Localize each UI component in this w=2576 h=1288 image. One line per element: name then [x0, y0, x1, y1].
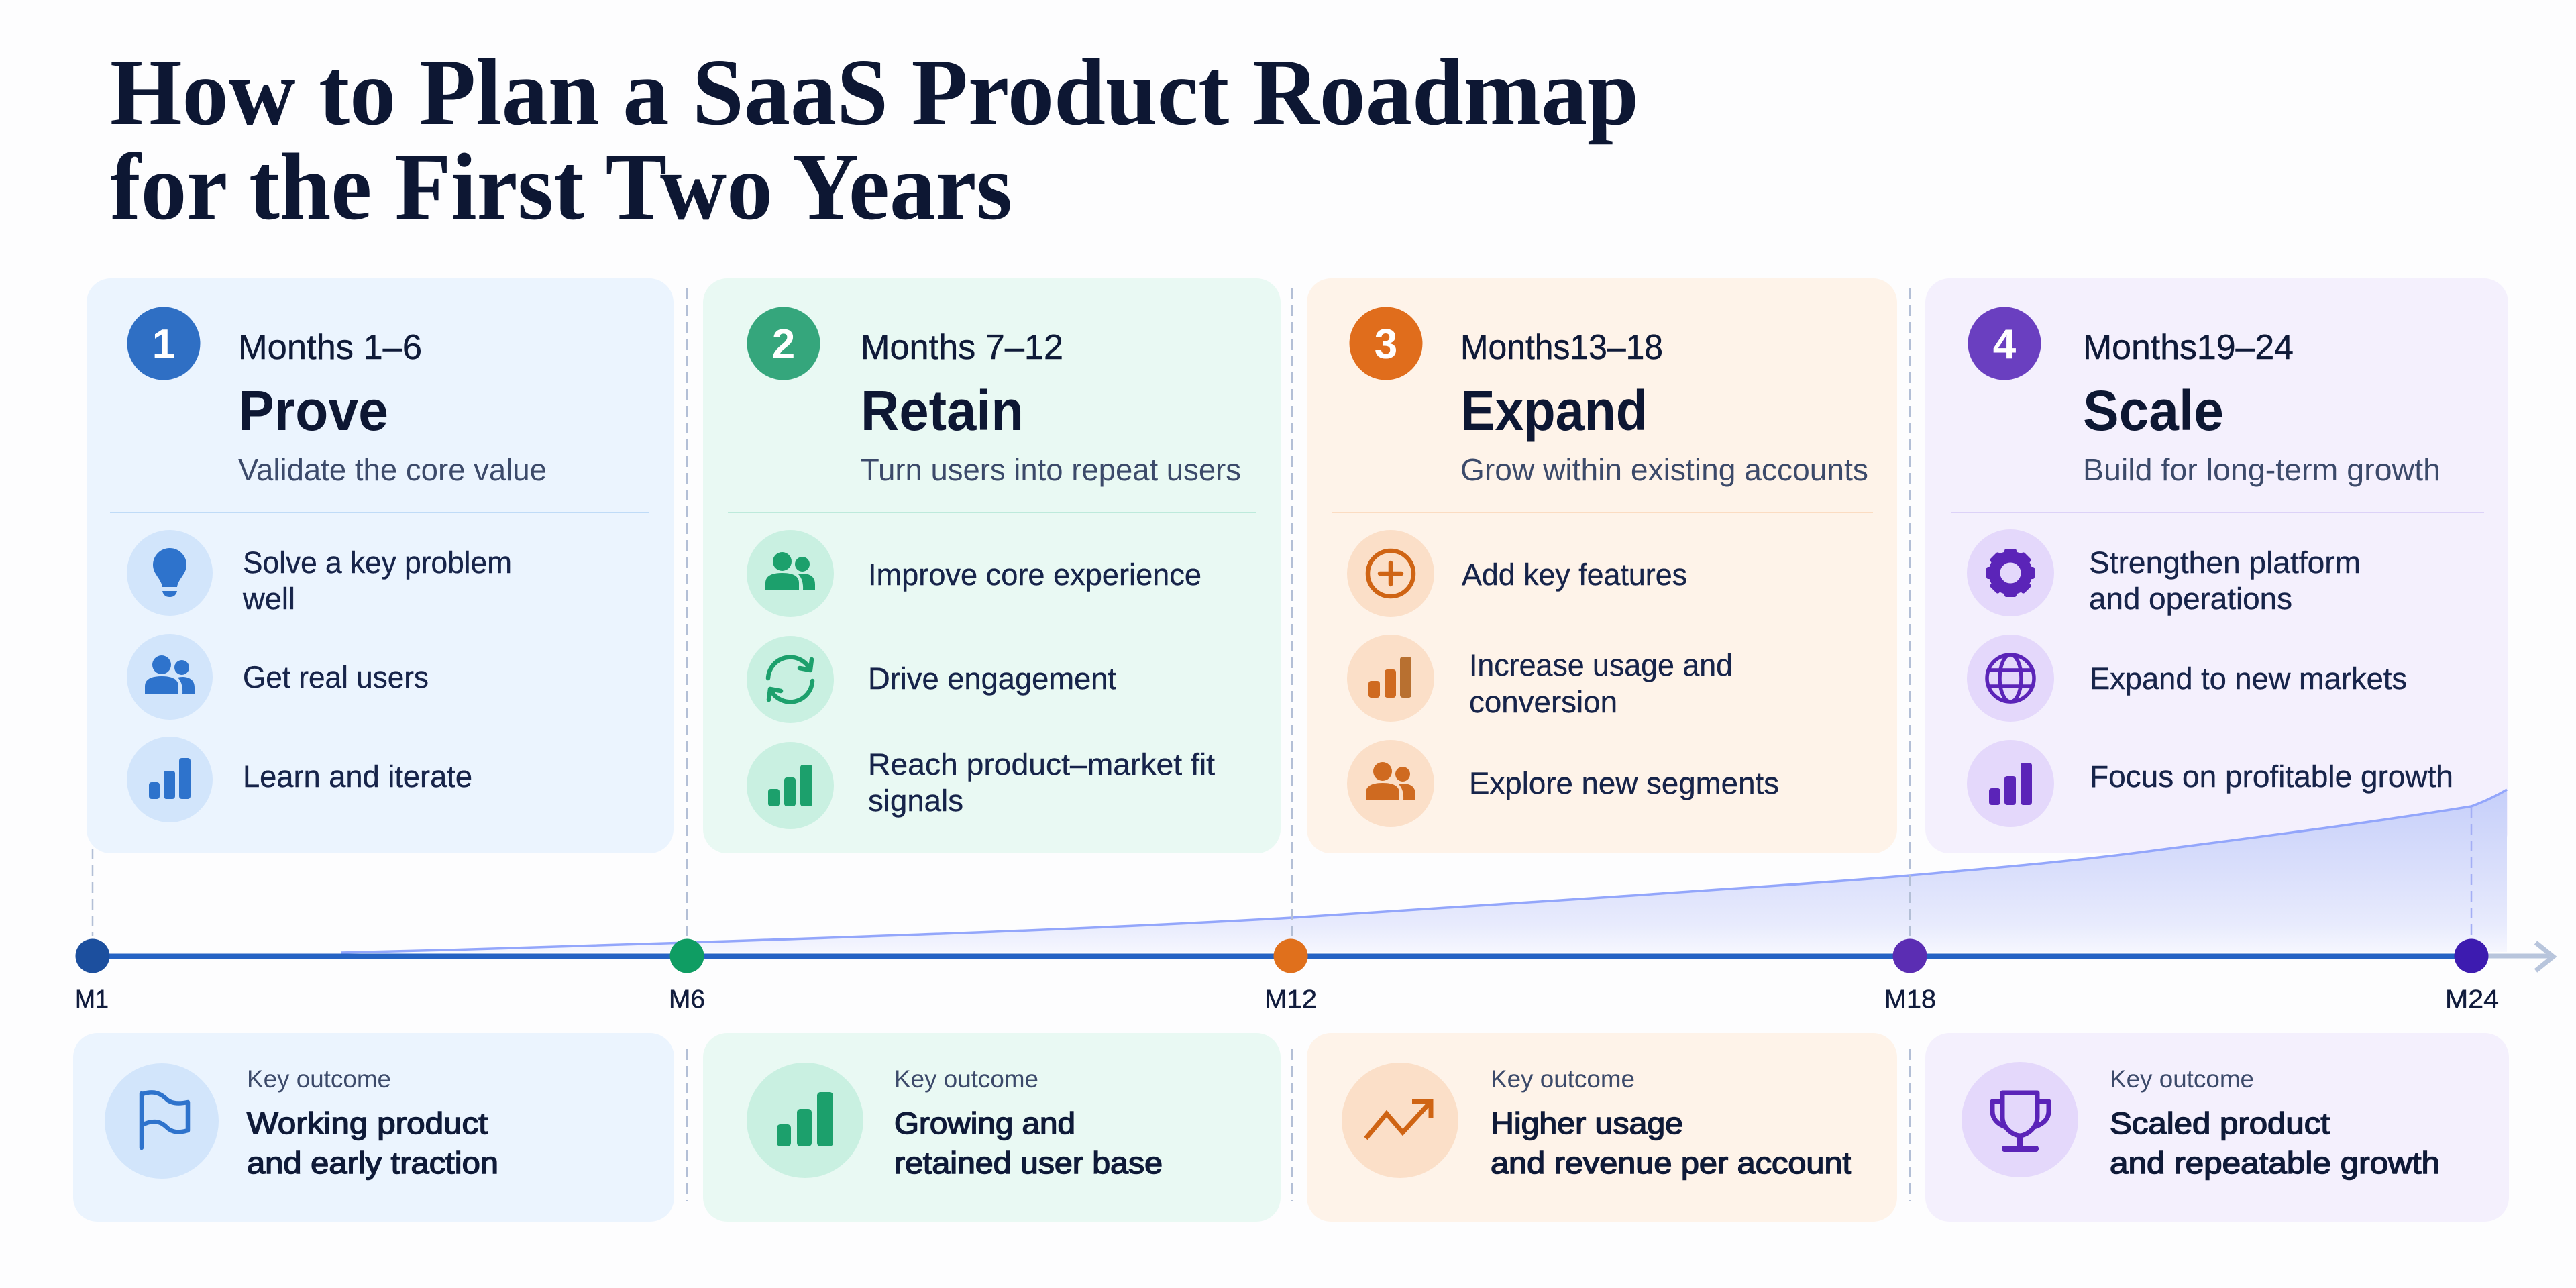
milestone M12: [1265, 939, 1317, 1014]
icon: bar chart: [747, 1063, 863, 1178]
item: learn and iterate: Learn and iterate: [243, 759, 472, 794]
item: increase usage and conversion: [1347, 635, 1733, 722]
outcome text 3: Key outcome: [1491, 1065, 1635, 1093]
outcome card 2: [703, 1033, 1281, 1222]
item: reach product-market fit signals: [747, 742, 1216, 829]
item: improve core experience: [747, 530, 1201, 617]
icon: trophy: [1962, 1062, 2078, 1177]
phase number badge 4: 4: [1993, 321, 2017, 368]
milestone M1: [75, 939, 110, 1014]
milestone M18: [1884, 939, 1936, 1014]
outcome text 1: and early traction: [247, 1146, 498, 1180]
phase 2 heading: Months 7–12: [861, 328, 1063, 367]
phase 4 heading: [2083, 328, 2440, 487]
item: increase usage and conversion: conversion: [1469, 685, 1617, 719]
item: strengthen platform and operations: [1967, 529, 2361, 616]
outcome text 2: Growing and: [894, 1106, 1075, 1140]
outcome text 1: Key outcome: [247, 1065, 391, 1093]
outcome card 4: [1925, 1033, 2509, 1222]
item: drive engagement: Drive engagement: [868, 661, 1116, 696]
outcome text 2: [894, 1065, 1163, 1180]
growth area curve: [341, 790, 2507, 953]
outcome text 4: Key outcome: [2110, 1065, 2254, 1093]
outcome text 3: Higher usage: [1491, 1106, 1683, 1140]
item: add key features: Add key features: [1462, 557, 1687, 592]
item: drive engagement: [747, 636, 1116, 723]
outcome text 1: [247, 1065, 498, 1180]
phase number badge 3: 3: [1375, 321, 1397, 368]
outcome text 2: retained user base: [894, 1146, 1163, 1180]
milestone dashed guides: [93, 288, 2471, 1201]
milestone M18: M18: [1884, 985, 1936, 1014]
panel: phase 1 prove: [87, 278, 674, 853]
title: [110, 39, 1639, 239]
item: reach product-market fit signals: Reach product–market fit: [868, 747, 1216, 782]
outcome text 4: Scaled product: [2110, 1106, 2330, 1140]
outcome card 3: [1307, 1033, 1897, 1222]
phase 2 heading: Retain: [861, 379, 1024, 442]
phase 1 heading: [238, 328, 547, 487]
item: increase usage and conversion: Increase usage and: [1469, 648, 1733, 682]
outcome text 4: [2110, 1065, 2440, 1180]
phase number badge 4: [1968, 307, 2041, 380]
item: learn and iterate: [127, 737, 472, 822]
title: How to Plan a SaaS Product Roadmap: [110, 39, 1639, 145]
phase 4 heading: Months19–24: [2083, 328, 2294, 367]
outcome text 3: and revenue per account: [1491, 1146, 1852, 1180]
item: solve a key problem: well: [242, 582, 295, 616]
phase 4 heading: Build for long-term growth: [2083, 452, 2440, 487]
phase 3 heading: [1460, 328, 1868, 487]
panel: phase 4 scale: [1925, 278, 2508, 853]
item: reach product-market fit signals: signals: [868, 784, 963, 818]
item: focus on profitable growth: [1967, 740, 2453, 827]
phase 4 heading: Scale: [2083, 379, 2224, 442]
milestone M6: M6: [669, 985, 705, 1014]
item: solve a key problem: [127, 530, 512, 616]
milestone M1: M1: [75, 985, 109, 1014]
outcome text 3: [1491, 1065, 1852, 1180]
outcome card 1: [73, 1033, 674, 1222]
item: expand to new markets: [1967, 635, 2407, 722]
item: explore new segments: Explore new segments: [1469, 766, 1779, 800]
phase number badge 1: [127, 307, 200, 380]
item: add key features: [1347, 530, 1687, 617]
item: improve core experience: Improve core experience: [868, 557, 1201, 592]
outcome text 2: Key outcome: [894, 1065, 1038, 1093]
item: focus on profitable growth: Focus on profitable growth: [2090, 759, 2453, 794]
icon: flag: [105, 1063, 219, 1179]
item: strengthen platform and operations: Strengthen platform: [2089, 545, 2361, 580]
phase number badge 2: 2: [772, 321, 795, 368]
panel: phase 3 expand: [1307, 278, 1897, 853]
milestone M12: M12: [1265, 985, 1317, 1014]
item: get real users: Get real users: [243, 660, 429, 694]
outcome text 4: and repeatable growth: [2110, 1146, 2440, 1180]
item: solve a key problem: Solve a key problem: [243, 545, 512, 580]
milestone M6: [669, 939, 705, 1014]
phase 1 heading: Months 1–6: [238, 328, 422, 367]
phase 2 heading: Turn users into repeat users: [861, 452, 1241, 487]
panel: phase 2 retain: [703, 278, 1281, 853]
item: expand to new markets: Expand to new markets: [2090, 661, 2407, 696]
milestone M24: [2445, 939, 2499, 1014]
timeline axis with arrow: [93, 943, 2553, 971]
phase 1 heading: Validate the core value: [238, 452, 547, 487]
title: for the First Two Years: [110, 133, 1012, 239]
icon: trend arrow: [1342, 1063, 1458, 1178]
phase 2 heading: [861, 328, 1241, 487]
phase 3 heading: Months13–18: [1460, 328, 1663, 367]
milestone M24: M24: [2445, 985, 2499, 1014]
phase number badge 1: 1: [152, 321, 175, 368]
item: get real users: [127, 634, 429, 720]
phase 1 heading: Prove: [238, 379, 388, 442]
phase number badge 3: [1350, 307, 1422, 380]
phase 3 heading: Grow within existing accounts: [1460, 452, 1868, 487]
outcome text 1: Working product: [247, 1106, 488, 1140]
item: strengthen platform and operations: and operations: [2089, 582, 2292, 616]
phase 3 heading: Expand: [1460, 379, 1648, 442]
item: explore new segments: [1347, 740, 1779, 827]
phase number badge 2: [747, 307, 820, 380]
